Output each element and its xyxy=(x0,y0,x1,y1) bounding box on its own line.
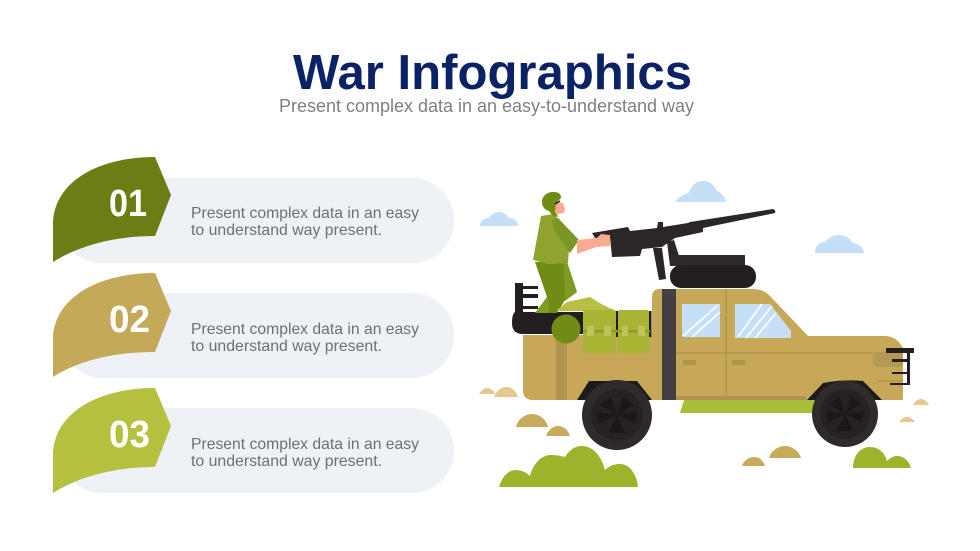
text 01: Present complex data in an easy xyxy=(191,205,419,222)
number 01: 01 xyxy=(109,183,147,225)
text 02: to understand way present. xyxy=(191,338,382,355)
number 03: 03 xyxy=(109,414,150,456)
badge 02 xyxy=(53,273,171,377)
face xyxy=(551,202,565,218)
pill background 01 xyxy=(60,178,454,263)
icon: ground mounds xyxy=(479,387,929,466)
sandbag mound xyxy=(557,297,616,311)
panel: item 02 xyxy=(53,273,454,378)
badge 01 xyxy=(53,157,171,262)
panel: item 03 xyxy=(53,388,454,493)
rocker xyxy=(676,396,806,400)
text 02: Present complex data in an easy xyxy=(191,321,419,338)
text 01: to understand way present. xyxy=(191,222,382,239)
ammo bags xyxy=(583,310,650,353)
door pillar xyxy=(662,289,676,400)
bed stripe xyxy=(556,336,567,400)
door handles xyxy=(683,360,745,365)
soldier forearm and hand xyxy=(577,234,610,254)
number 02: 02 xyxy=(109,299,150,341)
icon: bushes xyxy=(499,446,911,487)
pill background 03 xyxy=(60,408,454,493)
truck body xyxy=(523,289,903,400)
panel: item 01 xyxy=(53,157,454,263)
windows xyxy=(682,304,791,338)
spare wheel circle xyxy=(552,314,580,344)
machine gun xyxy=(592,209,775,288)
title: War Infographics xyxy=(293,46,692,100)
illustration: war truck scene xyxy=(479,181,929,487)
text 03: Present complex data in an easy xyxy=(191,436,419,453)
icon: clouds xyxy=(480,181,864,253)
front wheel xyxy=(807,380,882,447)
front bumper guard xyxy=(886,348,914,385)
text 03: to understand way present. xyxy=(191,453,382,470)
torso xyxy=(533,214,570,264)
soldier xyxy=(533,192,579,313)
arm sleeve xyxy=(552,218,579,253)
badge 03 xyxy=(53,388,171,493)
helmet xyxy=(542,192,561,217)
green ground strip under truck xyxy=(680,400,815,413)
rear wheel xyxy=(577,380,652,450)
subtitle: Present complex data in an easy-to-understand way xyxy=(279,95,695,116)
headlight xyxy=(873,352,903,367)
rear rack and platform xyxy=(512,283,652,337)
door lines xyxy=(676,289,885,396)
pill background 02 xyxy=(60,293,454,378)
legs xyxy=(535,262,577,313)
